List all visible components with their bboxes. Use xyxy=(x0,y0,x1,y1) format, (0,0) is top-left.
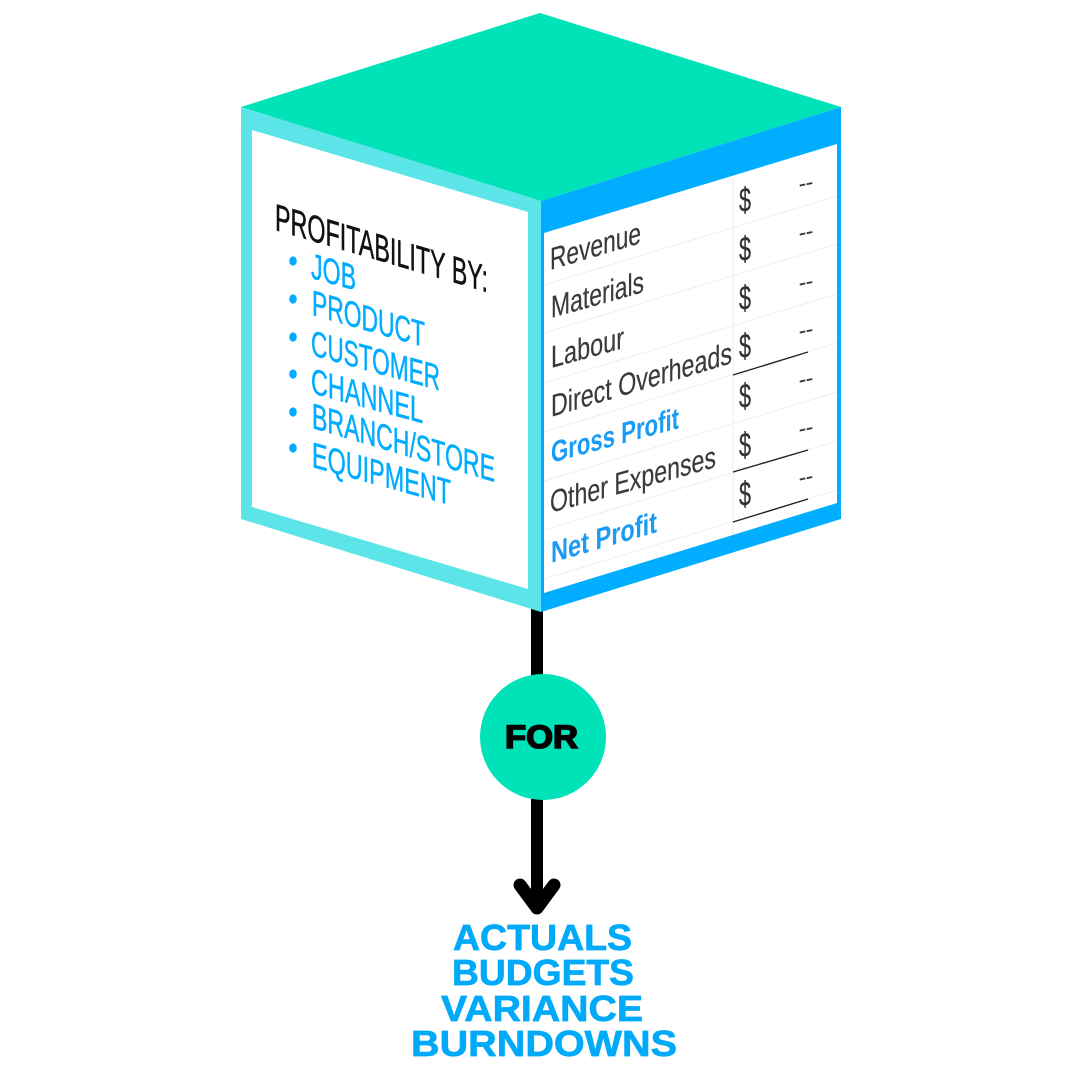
row labels: Materials xyxy=(551,264,644,325)
row labels: Gross Profit xyxy=(551,402,679,470)
heading: profitability by: PROFITABILITY BY: xyxy=(275,197,488,301)
value column: -- xyxy=(799,367,813,392)
outcome list: VARIANCE xyxy=(441,988,643,1029)
dollar column: $ xyxy=(739,279,751,318)
dollar column: $ xyxy=(739,475,751,514)
value column: -- xyxy=(799,465,813,490)
dollar column xyxy=(739,181,751,514)
value column: -- xyxy=(799,318,813,343)
cube top face xyxy=(241,13,841,201)
row labels xyxy=(550,215,732,570)
dollar column: $ xyxy=(739,377,751,416)
dollar column: $ xyxy=(739,181,751,220)
panel: profitability dimensions xyxy=(241,107,541,612)
badge: for xyxy=(480,674,606,800)
row labels: Other Expenses xyxy=(550,439,716,520)
dollar column: $ xyxy=(739,327,751,366)
list: profitability dimensions: JOB xyxy=(311,246,356,298)
value column: -- xyxy=(799,416,813,441)
outcome list: BURNDOWNS xyxy=(411,1023,677,1064)
outcome list: BUDGETS xyxy=(452,952,634,993)
badge: for: FOR xyxy=(505,719,578,755)
list: profitability dimensions: CUSTOMER xyxy=(311,323,440,398)
list: profitability dimensions: BRANCH/STORE xyxy=(312,396,495,490)
outcome list xyxy=(411,917,677,1064)
list: profitability dimensions: PRODUCT xyxy=(312,283,425,355)
cube xyxy=(241,13,841,612)
list: profitability dimensions xyxy=(289,246,495,513)
value column: -- xyxy=(799,270,813,295)
value column: -- xyxy=(799,171,813,196)
row labels: Labour xyxy=(551,319,624,375)
row labels: Net Profit xyxy=(551,506,657,570)
row labels: Revenue xyxy=(550,215,641,277)
value column xyxy=(799,171,813,490)
dollar column: $ xyxy=(739,230,751,269)
outcome list: ACTUALS xyxy=(453,917,632,958)
dollar column: $ xyxy=(739,426,751,465)
panel: profit and loss statement xyxy=(541,107,841,612)
list: profitability dimensions: CHANNEL xyxy=(311,361,423,431)
row labels: Direct Overheads xyxy=(551,335,732,424)
subtotal rules xyxy=(733,352,808,522)
value column: -- xyxy=(799,220,813,245)
list: profitability dimensions: EQUIPMENT xyxy=(312,435,451,513)
arrow: connector from cube to outcomes xyxy=(520,605,554,908)
